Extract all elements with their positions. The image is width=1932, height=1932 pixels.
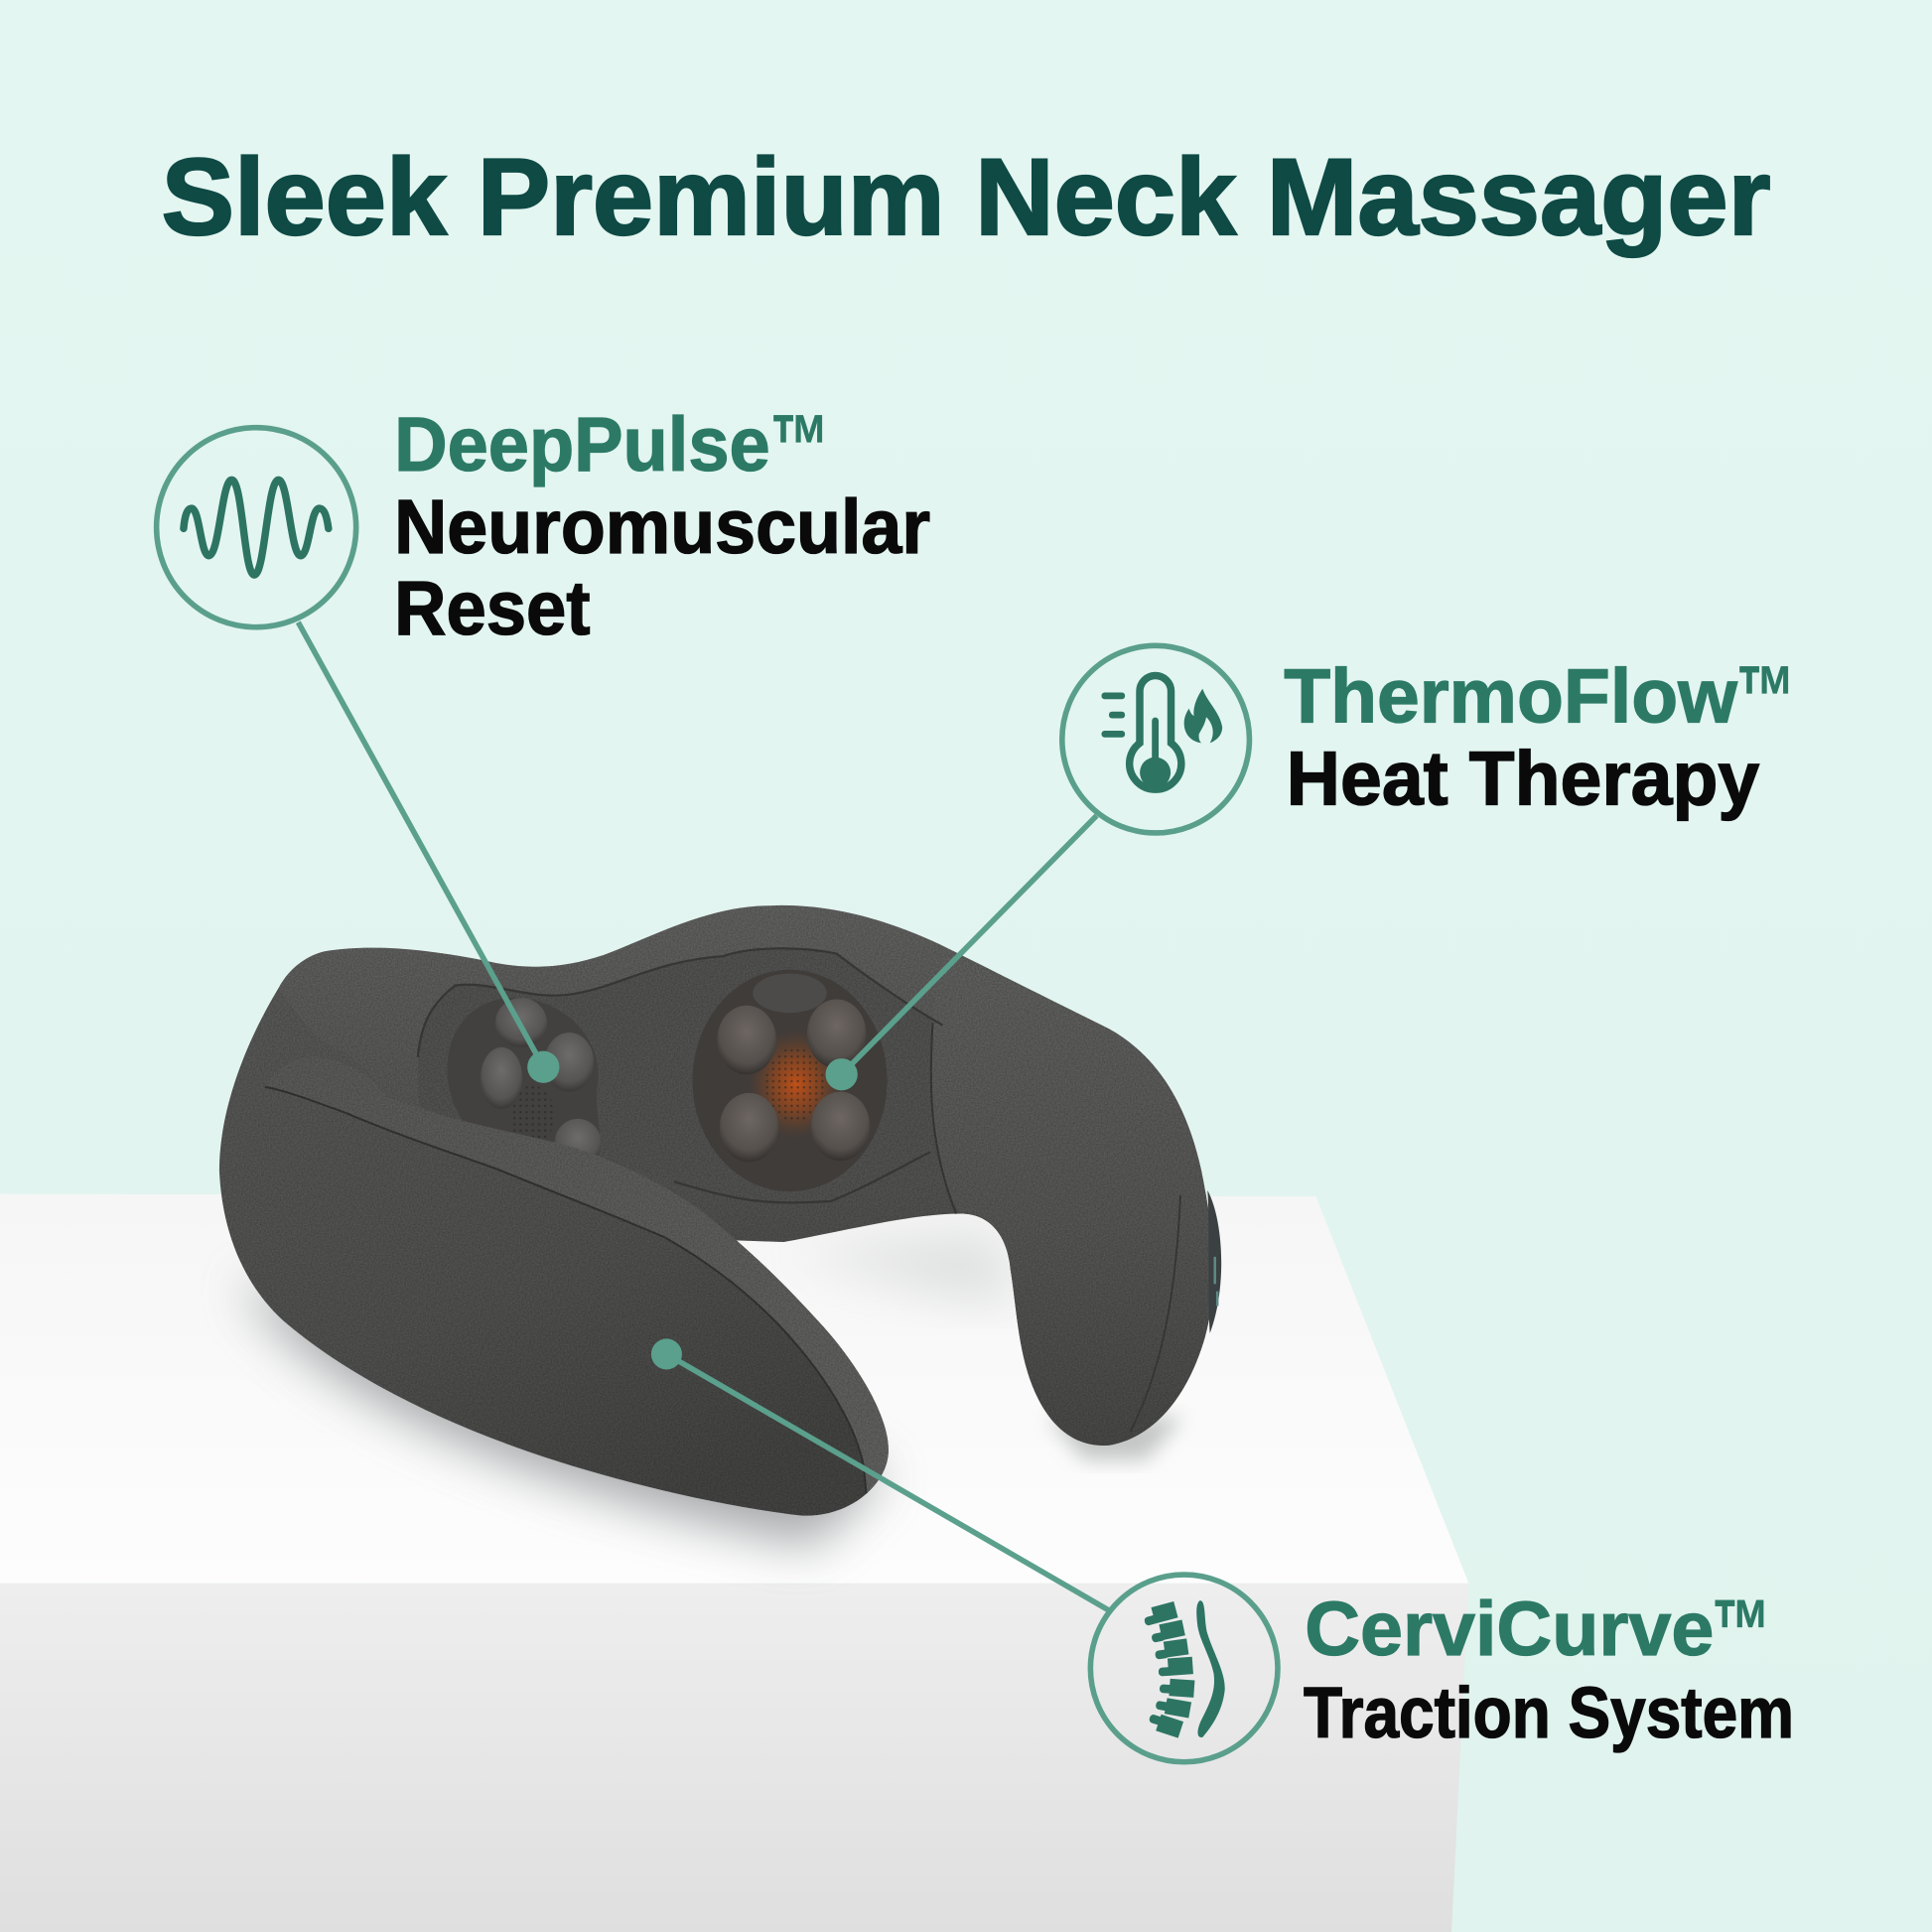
title: Sleek Premium Neck Massager xyxy=(162,137,1770,258)
massager front left arm xyxy=(219,988,889,1516)
icon: pulse wave in circle xyxy=(157,428,356,627)
icon: side control panel xyxy=(1207,1190,1221,1333)
callout: ThermoFlow connector line and dot xyxy=(826,816,1097,1090)
seam around massage recess xyxy=(418,948,942,1202)
text: DeepPulse: Neuromuscular xyxy=(394,484,930,570)
text: DeepPulse: ™ xyxy=(770,397,829,493)
text: CerviCurve: CerviCurve xyxy=(1305,1587,1714,1672)
text: DeepPulse: DeepPulse xyxy=(394,402,770,487)
white pedestal block xyxy=(0,1194,1468,1932)
massager back body and right arm xyxy=(246,905,1213,1446)
text: DeepPulse xyxy=(394,397,930,651)
neck massager product xyxy=(219,905,1221,1516)
icon: right massage node pod with heat glow xyxy=(692,970,888,1191)
text: ThermoFlow: Heat Therapy xyxy=(1287,736,1759,821)
text: ThermoFlow: ThermoFlow xyxy=(1284,653,1737,739)
text: CerviCurve xyxy=(1304,1583,1794,1753)
callout: DeepPulse connector line and dot xyxy=(298,622,559,1083)
text: CerviCurve: Traction System xyxy=(1304,1674,1794,1753)
icon: spine in circle xyxy=(1090,1575,1278,1762)
text: CerviCurve: ™ xyxy=(1712,1583,1770,1679)
product shadow xyxy=(240,1232,1182,1547)
text: DeepPulse: Reset xyxy=(394,566,590,651)
text: ThermoFlow: ™ xyxy=(1736,648,1795,745)
icon: thermometer and flame in circle xyxy=(1062,645,1249,833)
icon: left massage node pod xyxy=(447,998,602,1169)
callout: CerviCurve connector line and dot xyxy=(651,1338,1109,1610)
text: ThermoFlow xyxy=(1284,648,1795,821)
